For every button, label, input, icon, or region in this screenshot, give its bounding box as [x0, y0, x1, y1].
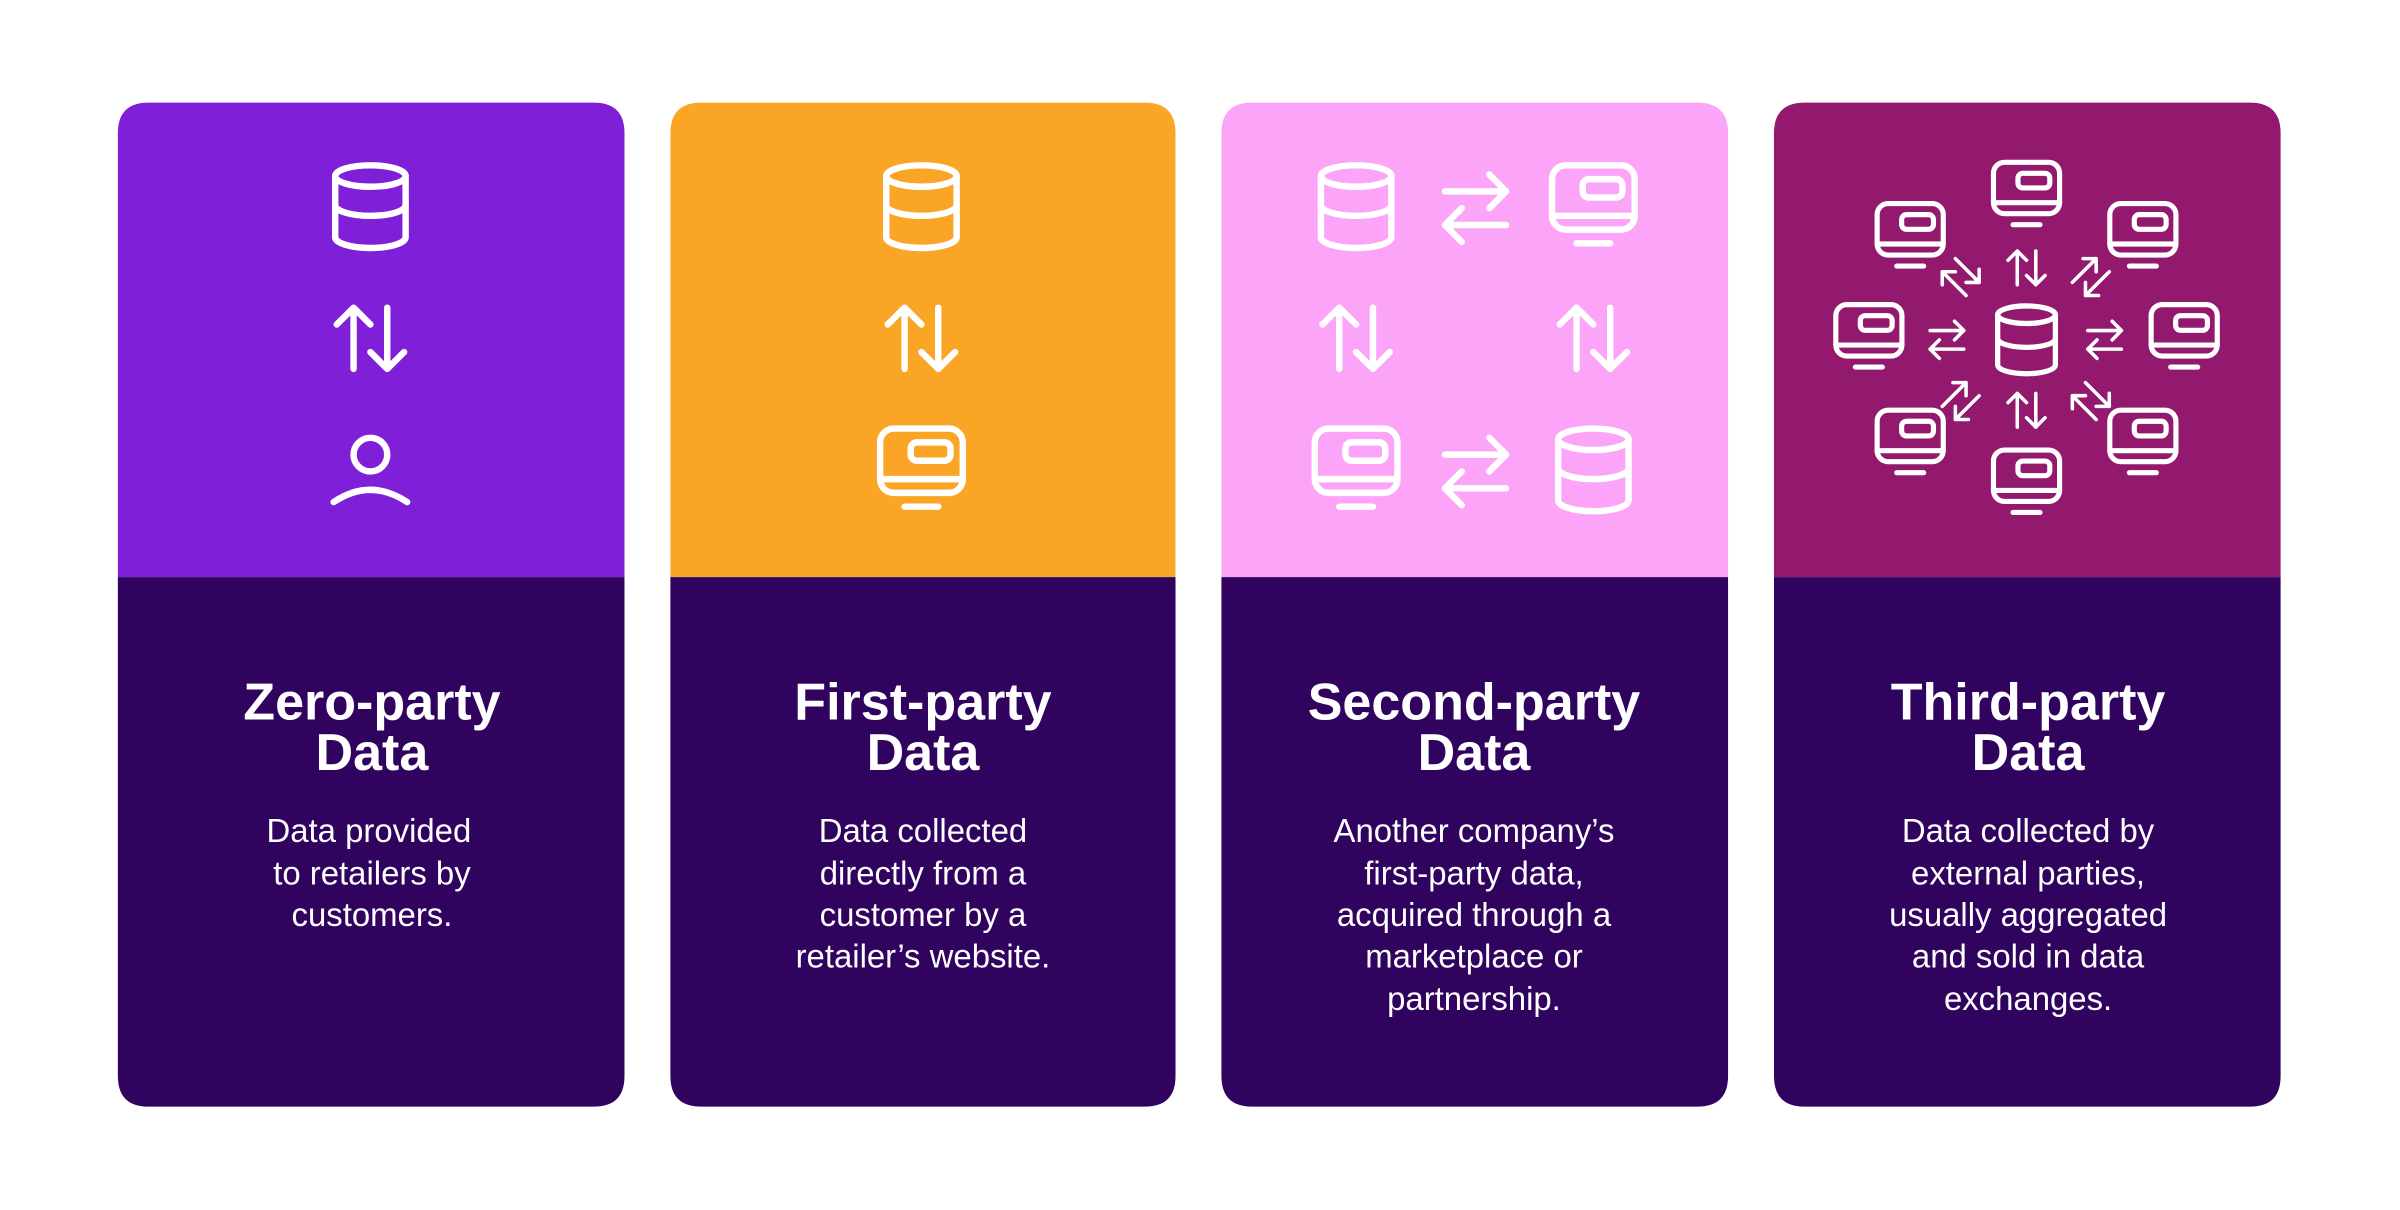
arrow: up-down [337, 308, 404, 369]
icon: network monitors [1836, 162, 2217, 512]
heading: Data [1972, 724, 2086, 782]
icon: monitor [880, 429, 963, 507]
text block: Data collected by [1902, 812, 2154, 849]
text block: first-party data, [1364, 855, 1584, 892]
text block: external parties, [1911, 855, 2145, 892]
heading: Data [316, 724, 429, 782]
heading: Data [1418, 724, 1531, 782]
panel: zero-party [118, 103, 624, 1107]
text block: Data collected [819, 812, 1027, 849]
heading: Second-party [1308, 673, 1640, 731]
heading: Third-party [1891, 673, 2165, 731]
icon: monitor [1315, 429, 1397, 507]
text block: acquired through a [1337, 896, 1612, 933]
panel: second-party [1221, 103, 1728, 1107]
icon: central database [1998, 306, 2055, 374]
arrow: up-down right [1560, 308, 1627, 369]
text block: retailer’s website. [796, 937, 1050, 974]
arrow: up-down left [1322, 308, 1390, 369]
heading: Data [867, 724, 980, 782]
arrow: up-down [888, 308, 955, 369]
icon: person [334, 438, 407, 502]
icon: database [886, 165, 957, 248]
panel: third-party [1774, 103, 2281, 1107]
heading: Zero-party [243, 673, 501, 731]
icon: database [1321, 165, 1391, 248]
text block: customer by a [820, 896, 1027, 933]
text block: directly from a [820, 855, 1027, 892]
text block: Data provided [266, 812, 471, 849]
icon: monitor [1552, 165, 1635, 243]
text block: partnership. [1387, 980, 1561, 1017]
text block: marketplace or [1365, 937, 1583, 974]
arrow: left-right [1445, 175, 1506, 242]
text block: to retailers by [273, 855, 471, 892]
arrows: network exchanges [1930, 251, 2121, 427]
text block: customers. [292, 896, 452, 933]
heading: First-party [794, 673, 1052, 731]
panel: first-party [670, 103, 1176, 1107]
icon: database [335, 165, 406, 248]
text block: exchanges. [1944, 980, 2112, 1017]
text block: usually aggregated [1889, 896, 2167, 933]
text block: and sold in data [1912, 937, 2145, 974]
text block: Another company’s [1334, 812, 1614, 849]
arrow: left-right [1445, 438, 1506, 505]
icon: database [1558, 429, 1629, 511]
